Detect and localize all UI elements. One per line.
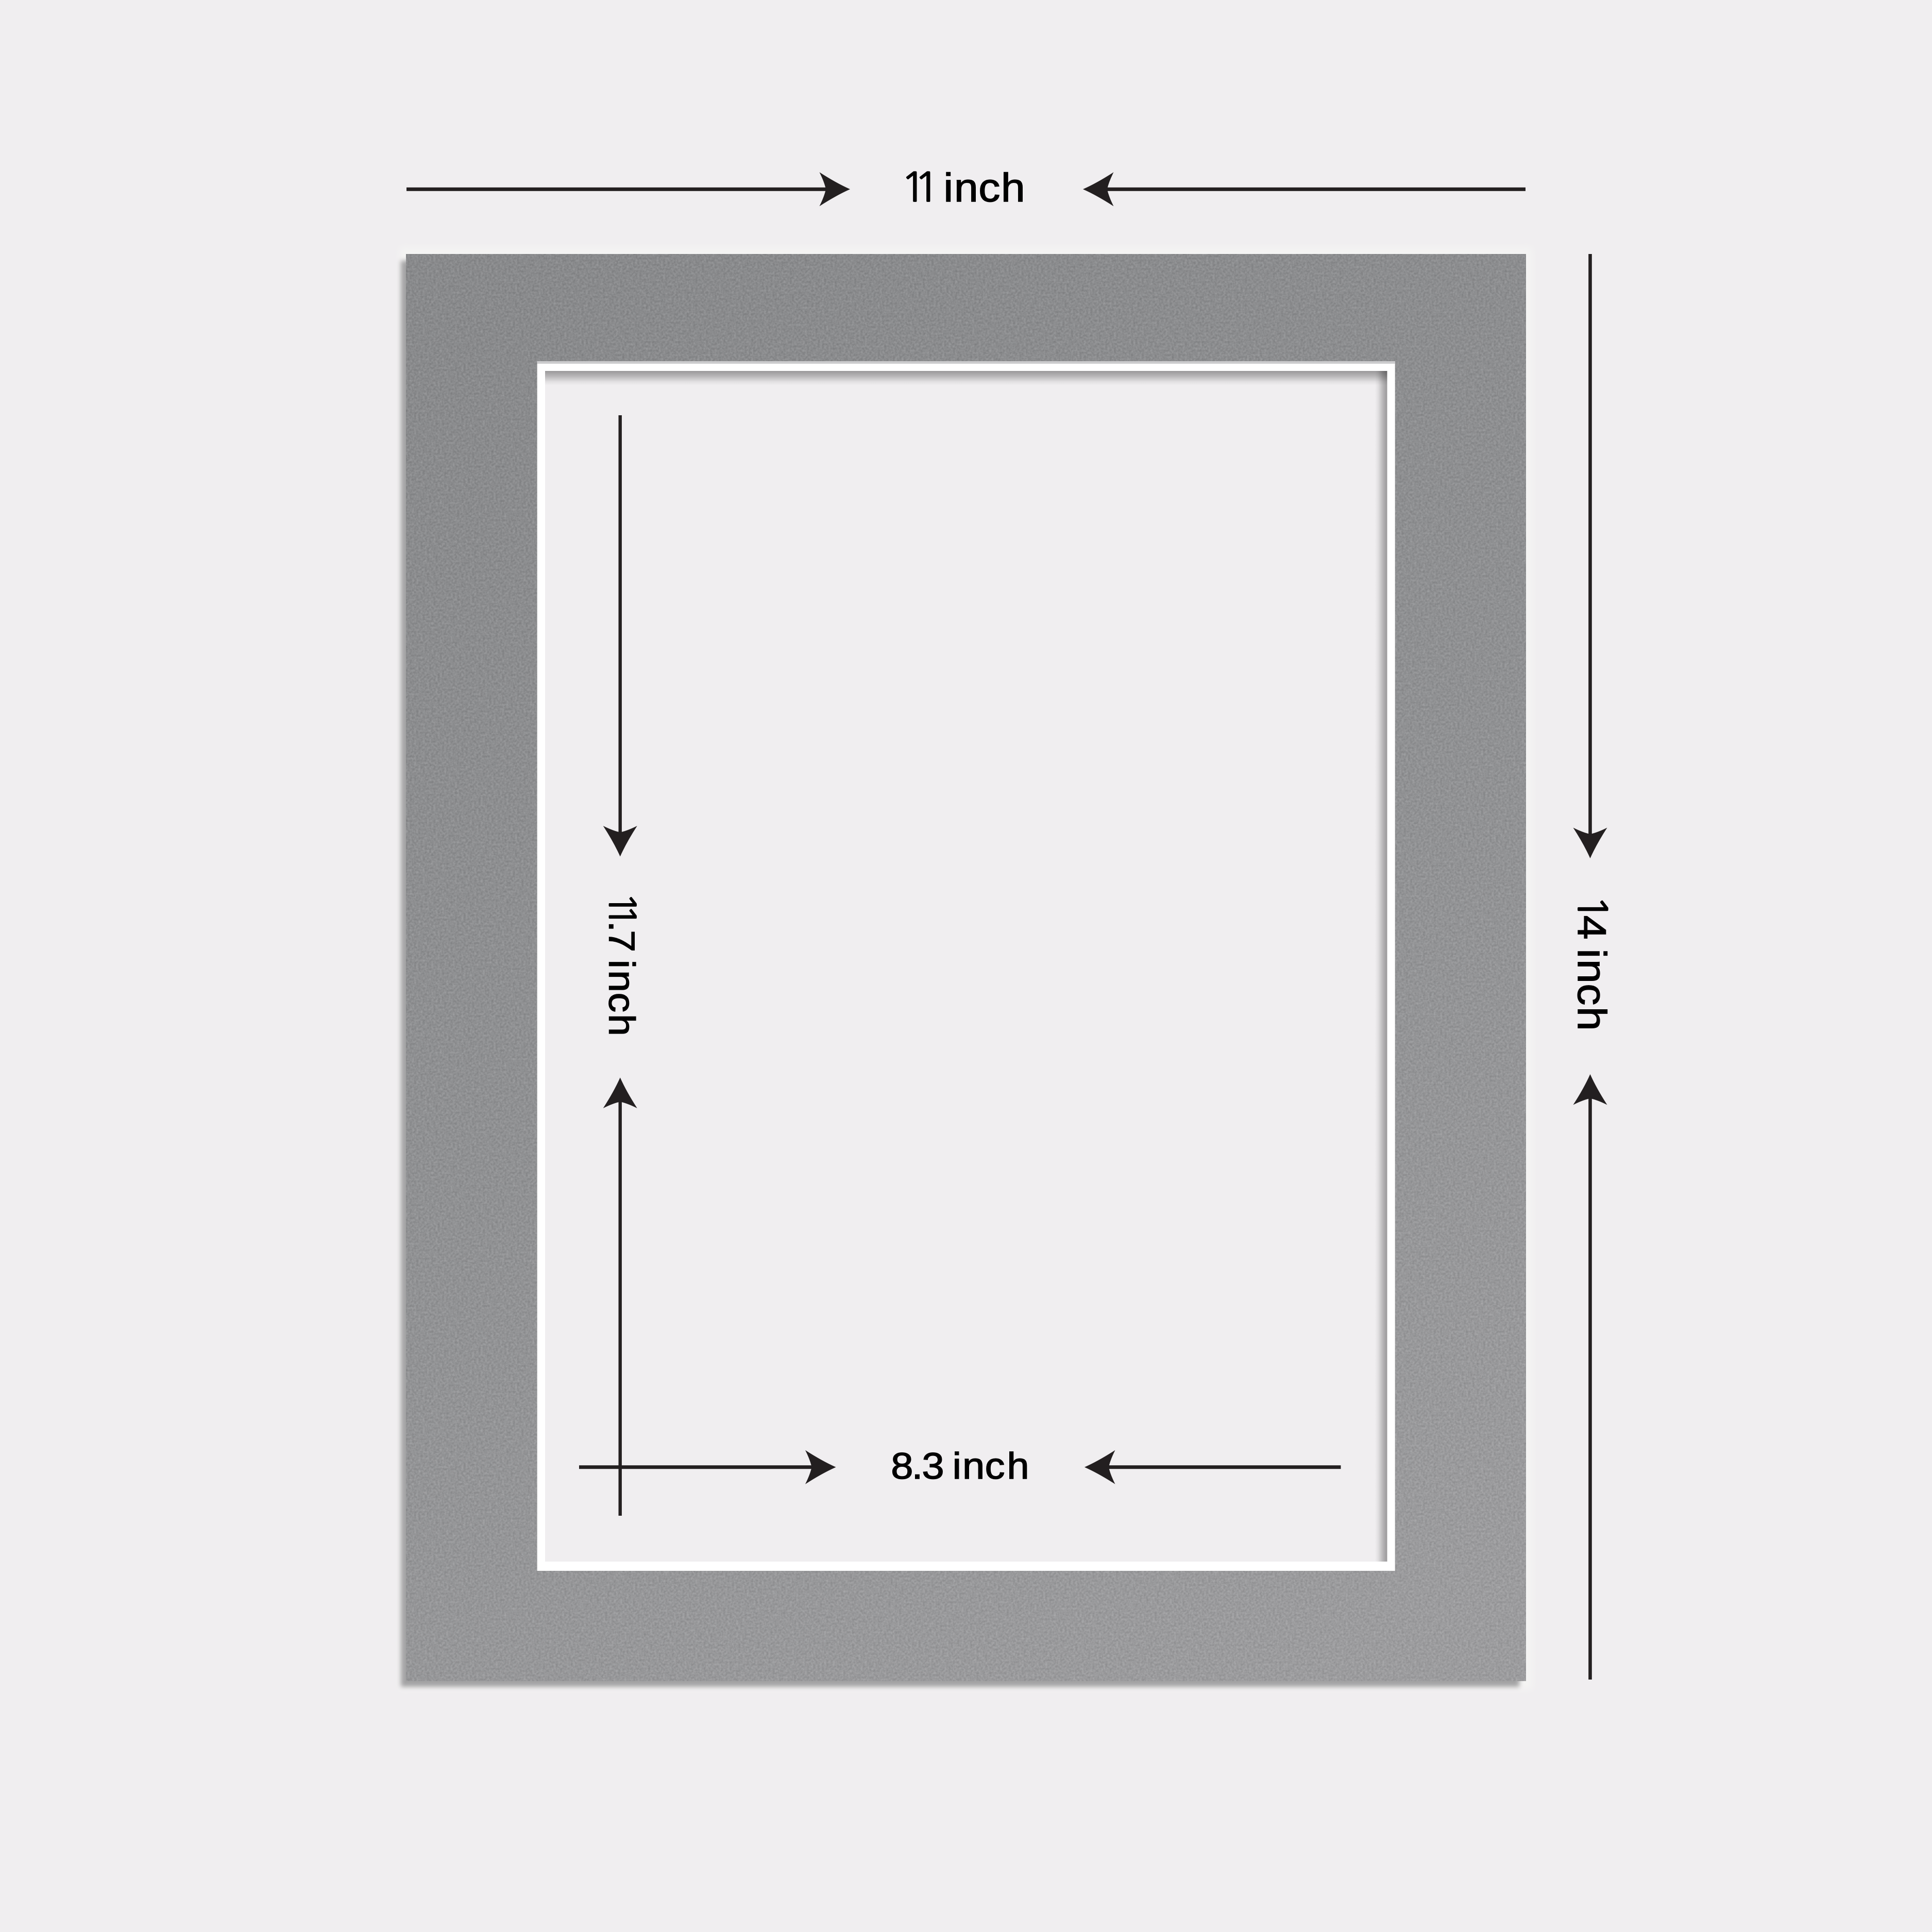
label: 11 inch: 11 inch — [901, 165, 1025, 210]
arrow: inner height, upper — [603, 415, 637, 856]
arrow: top width, left side — [406, 172, 850, 206]
label: 11.7 inch: 11.7 inch — [601, 892, 642, 1036]
label: 14 inch: 14 inch — [1569, 894, 1615, 1031]
arrow: outer height, lower — [1573, 1074, 1607, 1680]
white bevel of the mat opening — [537, 361, 1395, 1571]
inner shadow of the opening — [545, 371, 1387, 1562]
arrow: outer height, upper — [1573, 254, 1607, 858]
arrow: inner width, right side — [1084, 1450, 1341, 1484]
arrow: inner width, left side — [579, 1450, 836, 1484]
panel: mat board frame — [400, 248, 1532, 1689]
label: 8.3 inch: 8.3 inch — [891, 1446, 1029, 1487]
arrow: inner height, lower — [603, 1078, 637, 1516]
grey textured mat border — [406, 254, 1526, 1681]
arrow: top width, right side — [1083, 172, 1526, 206]
